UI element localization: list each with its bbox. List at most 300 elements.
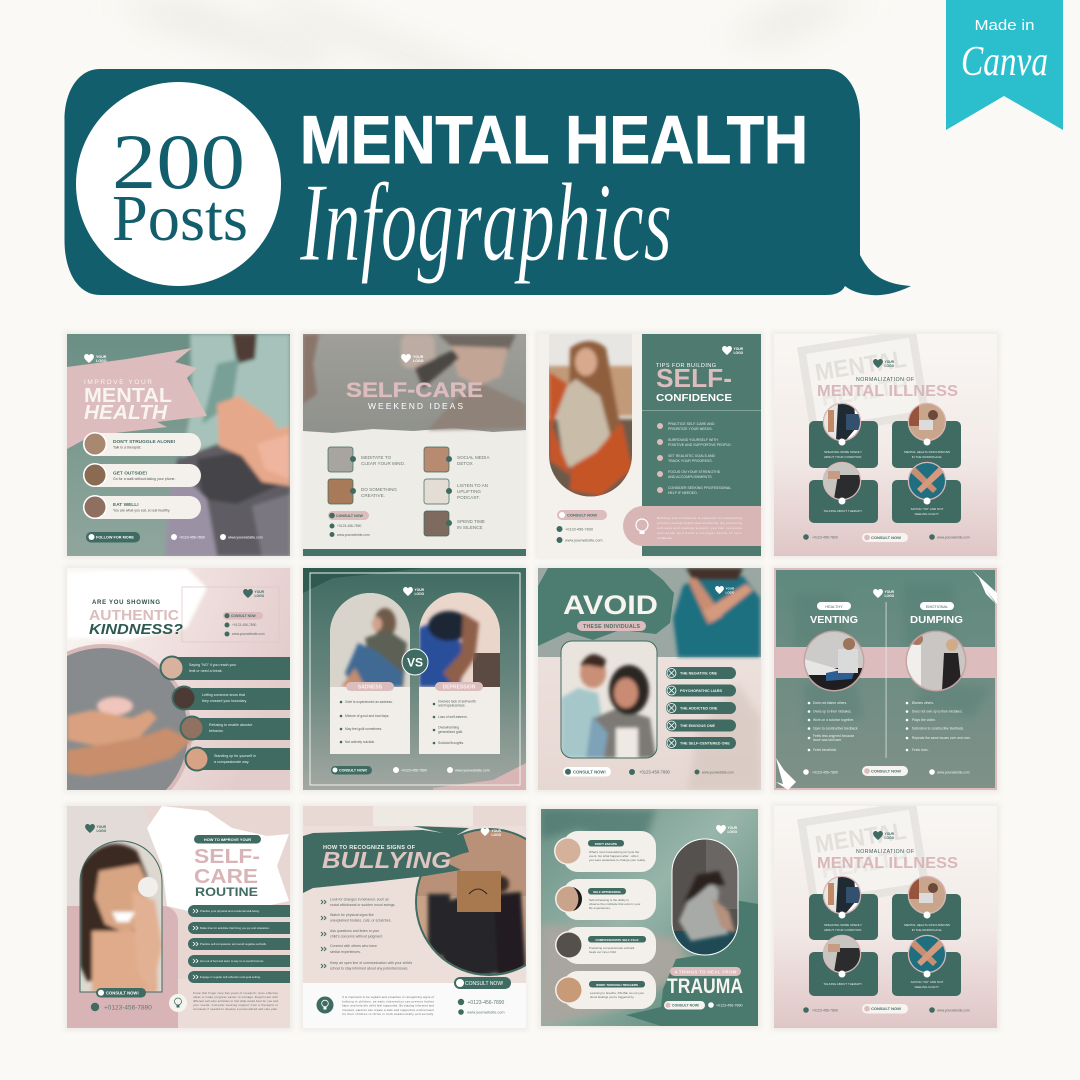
contact: CONSULT NOW! xyxy=(339,768,367,772)
tips list: CONSIDER SEEKING PROFESSIONAL xyxy=(668,486,731,490)
bar 4: a compassionate way. xyxy=(214,760,249,764)
photo: woman with cotton pad xyxy=(80,841,162,992)
contact xyxy=(803,766,970,776)
contact: CONSULT NOW xyxy=(871,535,901,540)
lists: Overwhelming xyxy=(438,726,459,730)
logo xyxy=(715,586,735,594)
contact xyxy=(664,1001,742,1010)
lists: Open to constructive feedback. xyxy=(813,726,859,730)
tips list: PRIORITIZE YOUR NEEDS. xyxy=(668,427,713,431)
lists: Feels beneficial. xyxy=(813,748,837,752)
lists: Loss of self-esteem. xyxy=(438,715,468,719)
circle photos xyxy=(824,404,946,504)
vs badge xyxy=(402,649,428,675)
logo: YOUR xyxy=(728,826,738,830)
vs badge: VS xyxy=(407,656,423,670)
item 1 xyxy=(554,831,656,872)
logo xyxy=(873,831,895,840)
bar 4 xyxy=(184,746,290,772)
labels: SADNESS xyxy=(358,684,383,690)
item 2: life experiences. xyxy=(589,906,611,910)
bar 1: limit or need a break. xyxy=(189,669,223,673)
logo: YOUR xyxy=(254,590,265,594)
note band xyxy=(623,506,761,546)
box captions: MENTAL HEALTH DISCUSSIONS xyxy=(904,923,950,927)
list pills xyxy=(666,667,736,749)
title speech bubble xyxy=(64,69,911,295)
panel: self-care routine xyxy=(67,806,290,1028)
photo: crossed arms xyxy=(673,568,760,657)
sign list: Connect with others who have xyxy=(330,944,377,948)
headline: SELF- xyxy=(194,846,260,868)
idea labels: DO SOMETHING xyxy=(361,487,397,492)
sign list: school to stay informed about any potential issues. xyxy=(330,966,408,970)
lists xyxy=(808,701,971,752)
box captions: TALKING ABOUT THERAPY. xyxy=(824,982,863,986)
panel: signs of bullying xyxy=(303,806,563,1028)
title: AVOID xyxy=(563,590,658,620)
idea labels: SOCIAL MEDIA xyxy=(457,455,490,460)
four boxes xyxy=(809,894,961,996)
title xyxy=(667,967,743,998)
box captions: ABOUT YOUR CONDITION. xyxy=(824,455,862,459)
headline xyxy=(817,849,958,872)
logo: LOGO xyxy=(96,359,107,363)
contact: www.yourwebsite.com xyxy=(937,770,970,774)
panel: sadness vs depression xyxy=(303,568,526,790)
headline: CARE xyxy=(194,866,258,888)
panel: normalization of mental illness xyxy=(774,333,997,556)
contact: +0123-456-7890 xyxy=(639,770,671,774)
left column heading: VENTING xyxy=(810,615,858,626)
idea thumbnails xyxy=(328,447,452,536)
white brush xyxy=(147,806,289,911)
heading: infographics: Infographics xyxy=(299,161,672,285)
right column heading: EMOTIONAL xyxy=(926,605,948,609)
lists: issue was laid bare. xyxy=(813,738,842,742)
logo: YOUR xyxy=(726,586,735,590)
faded sign: MENTAL xyxy=(813,346,908,387)
faded sign: HEALTH xyxy=(819,373,910,411)
item 3: COMPASSIONATE SELF-TALK xyxy=(595,938,639,942)
tip pill 3 xyxy=(83,495,201,519)
logo: YOUR xyxy=(734,347,744,351)
list pills: PSYCHOPATHIC LIARS xyxy=(680,689,723,693)
contact: +0123-456-7890 xyxy=(812,536,838,540)
headline: NORMALIZATION OF xyxy=(856,849,914,855)
right column heading: DUMPING xyxy=(910,615,963,626)
bulb badge xyxy=(316,996,334,1014)
lists: Feels toxic. xyxy=(912,748,929,752)
sign list: Ask questions and listen to your xyxy=(330,929,380,933)
logo: YOUR xyxy=(492,829,502,833)
badge: 200 posts: Posts xyxy=(112,182,248,255)
steps: Make time for activities that bring you joy and relaxation. xyxy=(200,926,270,930)
sign list xyxy=(321,898,412,970)
contact bar: +0123-456-7890 xyxy=(179,536,205,540)
pink panel xyxy=(67,906,178,1028)
contact: CONSULT NOW xyxy=(336,514,363,518)
consult pill: CONSULT NOW! xyxy=(106,990,139,995)
idea labels: LISTEN TO AN xyxy=(457,483,488,488)
note: Know that finger care has years of research; more effective xyxy=(193,991,278,995)
bar 4: Standing up for yourself in xyxy=(214,754,256,758)
tip pill 1 xyxy=(83,432,201,456)
contact xyxy=(331,766,490,774)
bar 2 xyxy=(172,686,290,710)
headline: CONFIDENCE xyxy=(656,393,732,404)
card shadows xyxy=(64,331,1000,1031)
made in canva ribbon: Canva xyxy=(961,39,1048,85)
left column heading xyxy=(810,602,858,626)
contact xyxy=(803,1004,970,1014)
logo xyxy=(722,346,744,355)
box captions: FEELING GUILTY. xyxy=(915,985,940,989)
headline: MENTAL ILLNESS xyxy=(817,855,958,872)
left column heading: HEALTHY xyxy=(825,605,843,609)
contact: +0123-456-7890 xyxy=(401,768,427,772)
idea labels: PODCAST. xyxy=(457,495,480,500)
lists: May feel guilt sometimes. xyxy=(345,727,382,731)
lists: and hopelessness. xyxy=(438,704,466,708)
contact: CONSULT NOW! xyxy=(672,1004,699,1008)
arch card: sadness xyxy=(330,593,410,754)
consult pill xyxy=(454,977,511,989)
panel: self-care weekend ideas xyxy=(303,334,526,556)
logo: LOGO xyxy=(492,833,502,837)
title: ARE YOU SHOWING xyxy=(92,600,160,606)
panel: avoid these individuals xyxy=(538,568,761,790)
contact bar xyxy=(86,532,263,542)
note: for their children to thrive in both academically and socially. xyxy=(342,1012,434,1016)
logo xyxy=(403,587,425,596)
idea labels: UPLIFTING xyxy=(457,489,481,494)
logo: LOGO xyxy=(728,830,738,834)
contact xyxy=(803,533,970,542)
title: SELF-CARE xyxy=(346,379,483,402)
note band: positive mental health and wellbeing. By practicing xyxy=(657,521,742,525)
panel: normalization of mental illness (repeat) xyxy=(774,805,997,1028)
box captions: SPEAKING MORE OPENLY xyxy=(824,923,862,927)
bar 3: behavior. xyxy=(209,729,224,733)
tip pill 1: DON'T STRUGGLE ALONE! xyxy=(113,439,176,445)
headline: NORMALIZATION OF xyxy=(856,377,914,383)
contact xyxy=(328,511,370,537)
note xyxy=(342,995,434,1016)
note band: self-care and seeking support, you can overcome xyxy=(657,526,742,530)
lists: Work on a solution together. xyxy=(813,718,854,722)
four boxes xyxy=(809,421,961,523)
note: bullying in children, as early intervention can prevent further xyxy=(342,999,434,1003)
tips list: SURROUND YOURSELF WITH xyxy=(668,438,718,442)
idea labels: DETOX xyxy=(457,461,473,466)
contact: www.yourwebsite.com xyxy=(565,538,603,542)
steps: Engage in regular self-reflection and goal setting. xyxy=(200,975,261,979)
list pills: THE ENVIOUS ONE xyxy=(680,724,715,728)
photo: stressed woman xyxy=(561,641,657,758)
idea labels: CREATIVE. xyxy=(361,493,385,498)
logo: YOUR xyxy=(884,832,895,836)
made in canva ribbon xyxy=(946,0,1063,130)
sign list: child's concerns without judgment. xyxy=(330,934,383,938)
tips list: HELP IF NEEDED. xyxy=(668,491,698,495)
steps: Practice your physical and emotional well-being. xyxy=(200,909,260,913)
logo xyxy=(84,354,107,363)
tips list: FOCUS ON YOUR STRENGTHS xyxy=(668,470,721,474)
contact bar: www.yourwebsite.com xyxy=(228,536,263,540)
contact xyxy=(458,999,505,1015)
box captions: FEELING GUILTY. xyxy=(915,512,940,516)
tip pill 2: Go for a walk without taking your phone. xyxy=(113,477,175,481)
lists: Does not blame others. xyxy=(813,701,847,705)
contact: CONSULT NOW xyxy=(871,1006,901,1011)
gray circle xyxy=(67,644,192,790)
box captions: TALKING ABOUT THERAPY. xyxy=(824,509,863,513)
labels: DEPRESSION xyxy=(443,684,476,690)
arch card: depression xyxy=(419,592,500,754)
lower right paper xyxy=(178,979,290,1028)
headline: MENTAL xyxy=(84,385,172,407)
headline xyxy=(194,835,261,899)
phone xyxy=(91,1003,152,1012)
note band: confidence. xyxy=(657,536,673,540)
contact bar: FOLLOW FOR MORE xyxy=(96,536,134,540)
faded sign xyxy=(802,333,925,432)
bar 3 xyxy=(180,716,290,740)
lists: Involves lack of self-worth xyxy=(438,700,476,704)
panel: things to heal from trauma xyxy=(541,809,758,1026)
photo: venting xyxy=(804,630,864,693)
idea labels: CLEAR YOUR MIND. xyxy=(361,461,405,466)
box captions: SPEAKING MORE OPENLY xyxy=(824,450,862,454)
contact: CONSULT NOW xyxy=(567,512,597,518)
contact: www.yourwebsite.com xyxy=(232,632,265,636)
headline xyxy=(84,380,172,419)
note: different self-care activities to find what works best for you and xyxy=(193,999,278,1003)
title xyxy=(89,600,183,638)
contact: +0123-456-7890 xyxy=(565,528,593,532)
phone: +0123-456-7890 xyxy=(104,1004,152,1012)
lists: Not actively suicidal. xyxy=(345,740,375,744)
item 4 xyxy=(555,971,656,1009)
contact: +0123-456-7890 xyxy=(468,1000,505,1006)
idea labels: SPEND TIME xyxy=(457,519,485,524)
headline: HOW TO IMPROVE YOUR xyxy=(204,837,251,842)
headline xyxy=(818,377,958,396)
item 2: observe the multitude that exist in your xyxy=(589,902,640,906)
title: BULLYING xyxy=(322,847,451,873)
logo: YOUR xyxy=(413,355,424,359)
contact: www.yourwebsite.com xyxy=(702,770,734,774)
divider xyxy=(885,602,887,758)
consult pill xyxy=(96,988,146,998)
logo: LOGO xyxy=(413,359,424,363)
photo: seated woman xyxy=(672,839,738,955)
photo circle xyxy=(415,828,563,978)
pink band xyxy=(776,647,995,678)
note band: Building self-confidence is essential for maintaining xyxy=(657,516,742,520)
item 4: show feelings you're triggered by. xyxy=(590,995,635,999)
logo: LOGO xyxy=(414,592,425,596)
logo: LOGO xyxy=(734,351,744,355)
contact: www.yourwebsite.com xyxy=(467,1010,505,1014)
logo: LOGO xyxy=(726,590,735,594)
steps xyxy=(188,905,290,983)
item 1: event, but what happens after - when xyxy=(589,854,639,858)
item 3 xyxy=(555,927,656,964)
panel: improve your mental health xyxy=(67,334,290,556)
lists xyxy=(340,700,476,745)
faded sign: HEALTH xyxy=(819,845,910,883)
logo: LOGO xyxy=(884,836,895,840)
headline: TIPS FOR BUILDING xyxy=(656,363,716,369)
box captions: SAYING "NO" AND NOT xyxy=(911,980,944,984)
green brush xyxy=(303,826,469,893)
idea labels xyxy=(361,455,490,530)
lists: Blames others. xyxy=(912,701,934,705)
heading: mental health: MENTAL HEALTH xyxy=(300,102,808,178)
sign list: unexplained bruises, cuts, or scratches. xyxy=(330,918,392,922)
lists: Defensive to constructive feedback. xyxy=(912,726,964,730)
bar 2: they crossed your boundary. xyxy=(202,699,247,703)
item 3: heals our inner child. xyxy=(589,950,617,954)
logo xyxy=(481,828,502,837)
title: HOW TO RECOGNIZE SIGNS OF xyxy=(323,845,416,851)
item 3: Practicing compassionate self-talk xyxy=(589,946,635,950)
title: KINDNESS? xyxy=(89,621,183,638)
headline: MENTAL ILLNESS xyxy=(817,383,958,400)
box captions: MENTAL HEALTH DISCUSSIONS xyxy=(904,450,950,454)
contact xyxy=(223,612,265,636)
headline: IMPROVE YOUR xyxy=(84,379,152,386)
contact: +0123-456-7890 xyxy=(716,1004,742,1008)
consult pill: CONSULT NOW! xyxy=(465,981,503,987)
white footer xyxy=(303,983,526,1028)
made in canva ribbon: Made in xyxy=(974,17,1034,34)
item 2 xyxy=(555,879,656,920)
logo: YOUR xyxy=(414,588,425,592)
panel: healthy venting vs emotional dumping xyxy=(774,568,997,790)
logo: YOUR xyxy=(884,360,895,364)
note: harm and help the child feel supported. By staying informed and xyxy=(342,1004,434,1008)
bar 3: Refusing to enable abusive xyxy=(209,723,252,727)
title: TRAUMA xyxy=(667,975,743,998)
contact: www.yourwebsite.com xyxy=(937,536,970,540)
bar 1: Saying "NO" if you reach your xyxy=(189,663,237,667)
badge: 200 posts: 200 xyxy=(112,118,245,205)
contact: +0123-456-7890 xyxy=(812,1008,838,1012)
sign list: Look for changes in behavior, such as xyxy=(330,898,389,902)
white brush corners xyxy=(776,570,997,790)
tips list: POSITIVE AND SUPPORTIVE PEOPLE. xyxy=(668,443,732,447)
contact: www.yourwebsite.com xyxy=(937,1008,970,1012)
sign list: Keep an open line of communication with your child's xyxy=(330,961,412,965)
item 4: Learning to breathe, PAUSE, let out your xyxy=(590,991,644,995)
list pills: THE ADDICTED ONE xyxy=(680,706,718,710)
note: counselor if needed to develop a personalized self-care plan. xyxy=(193,1007,278,1011)
box captions: IN THE WORKPLACE. xyxy=(912,455,942,459)
lists: Mixture of good and bad days. xyxy=(345,714,389,718)
lists: Suicidal thoughts. xyxy=(438,741,464,745)
logo: LOGO xyxy=(254,594,265,598)
photo: woman in orange blanket xyxy=(546,334,636,499)
box captions: SAYING "NO" AND NOT xyxy=(911,507,944,511)
lists: Grief is experienced as sadness. xyxy=(345,700,393,704)
tip pill 2 xyxy=(83,463,201,487)
box captions: IN THE WORKPLACE. xyxy=(912,928,942,932)
logo xyxy=(243,589,265,598)
logo: LOGO xyxy=(884,364,895,368)
footer band xyxy=(303,549,526,556)
tip pill 1: Talk to a therapist. xyxy=(113,446,141,450)
panel: tips for building self-confidence xyxy=(538,334,761,556)
brush: pink xyxy=(67,348,207,449)
contact: +0123-456-7890 xyxy=(337,524,361,528)
tips list: PRACTICE SELF-CARE AND xyxy=(668,422,715,426)
bar 1 xyxy=(160,656,290,680)
item 4: WORK THROUGH TRIGGERS xyxy=(596,983,638,987)
tip pill 3: You are what you eat, so eat healthy. xyxy=(113,508,170,512)
contact xyxy=(563,767,734,776)
subtitle pill: THESE INDIVIDUALS xyxy=(583,624,641,630)
box captions xyxy=(824,450,950,516)
idea labels: MEDITATE TO xyxy=(361,455,391,460)
lists: Feels less angered because xyxy=(813,734,854,738)
note: It is important to be vigilant and proactive in recognizing signs of xyxy=(342,995,434,999)
item 1: What's most traumatizing isn't just the xyxy=(589,850,639,854)
note: your needs. Consider seeking support from a therapist or xyxy=(193,1003,278,1007)
logo xyxy=(873,589,895,598)
logo: YOUR xyxy=(96,355,107,359)
lists: Owns up to their mistakes. xyxy=(813,710,852,714)
contact: www.yourwebsite.com xyxy=(337,533,370,537)
contact: CONSULT NOW xyxy=(871,768,901,774)
headline: ROUTINE xyxy=(195,887,258,899)
bulb badge xyxy=(169,994,187,1012)
tips list: AND ACCOMPLISHMENTS. xyxy=(668,475,713,479)
green brush xyxy=(538,568,674,646)
badge: 200 posts xyxy=(76,82,281,286)
list pills: THE SELF-CENTERED ONE xyxy=(680,741,730,745)
sign list: similar experiences. xyxy=(330,950,361,954)
logo: LOGO xyxy=(884,594,895,598)
circle photos xyxy=(824,876,946,978)
lists: Plays the victim. xyxy=(912,718,936,722)
note band: self-doubt and build a stronger sense of self- xyxy=(657,531,742,535)
right column heading xyxy=(910,602,963,626)
contact: CONSULT NOW! xyxy=(573,769,606,774)
labels xyxy=(346,682,483,691)
logo xyxy=(85,824,107,833)
lists: Repeats the same issues over and over. xyxy=(912,736,971,740)
logo xyxy=(873,359,895,368)
headline: SELF- xyxy=(656,363,732,393)
tips list xyxy=(657,422,732,495)
hands xyxy=(67,697,192,776)
contact: CONSULT NOW xyxy=(231,614,257,618)
item 2: Self-witnessing is the ability to xyxy=(589,898,629,902)
sign list: Watch for physical signs like xyxy=(330,913,374,917)
bar 2: Letting someone know that xyxy=(202,693,245,697)
item 1: DON'T ESCAPE xyxy=(595,842,617,846)
lists: generalized guilt. xyxy=(438,730,463,734)
sign list: social withdrawal or sudden mood swings. xyxy=(330,903,395,907)
steps: Practice self-compassion and avoid negative self-talk. xyxy=(200,942,267,946)
logo xyxy=(716,825,738,834)
logo: YOUR xyxy=(884,590,895,594)
title: 4 THINGS TO HEAL FROM xyxy=(674,970,737,974)
photo: dumping xyxy=(906,630,966,692)
